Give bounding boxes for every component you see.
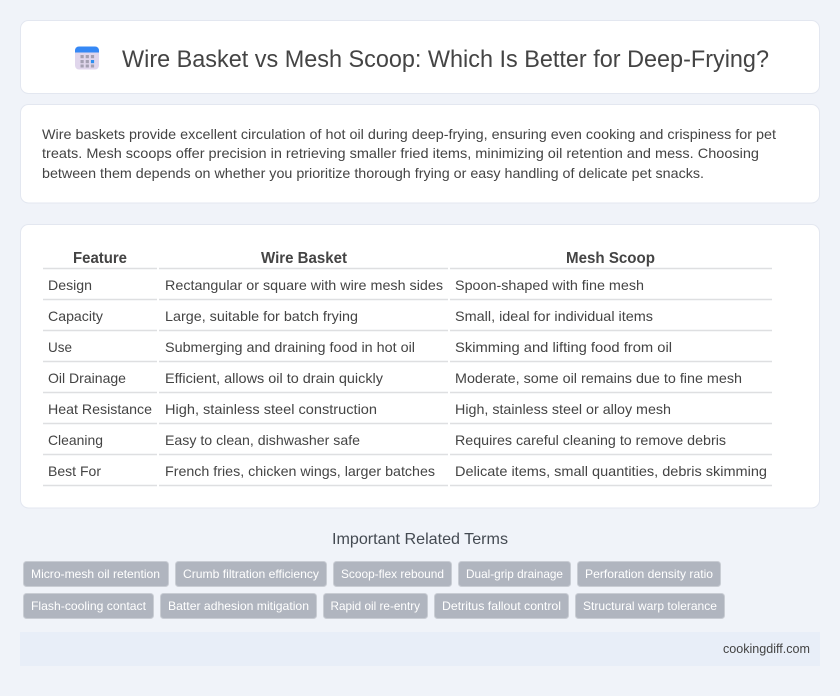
row: cleaning: Requires careful cleaning to remove debris [455, 432, 726, 448]
footer band [20, 632, 820, 666]
row: heat resistance: High, stainless steel construction [165, 401, 377, 417]
table header row: Mesh Scoop [566, 250, 655, 267]
row: heat resistance: Heat Resistance [48, 401, 152, 417]
row: use: Skimming and lifting food from oil [455, 339, 672, 355]
row: best for: Delicate items, small quantities, debris skimming [455, 463, 767, 479]
tag: structural warp tolerance: Structural warp tolerance [583, 599, 717, 613]
row: heat resistance [43, 401, 772, 424]
panel: introduction [20, 104, 820, 203]
icon: calendar [75, 46, 99, 70]
row: best for: French fries, chicken wings, larger batches [165, 463, 435, 479]
row: oil drainage: Moderate, some oil remains due to fine mesh [455, 370, 742, 386]
row: capacity: Large, suitable for batch frying [165, 308, 358, 324]
panel: title header [20, 20, 820, 94]
tag: scoop-flex rebound [334, 562, 452, 586]
row: use [43, 339, 772, 362]
tag: batter adhesion mitigation [160, 594, 316, 618]
tag: detritus fallout control: Detritus fallout control [442, 599, 561, 613]
tag: structural warp tolerance [576, 594, 724, 618]
table header row: Feature [73, 250, 127, 267]
tag: crumb filtration efficiency [176, 562, 326, 586]
tag: rapid oil re-entry: Rapid oil re-entry [330, 599, 420, 613]
row: capacity [43, 308, 772, 330]
tag: perforation density ratio [578, 562, 720, 586]
tag: batter adhesion mitigation: Batter adhesion mitigation [168, 599, 309, 613]
table header row [43, 250, 772, 268]
row: capacity: Capacity [48, 308, 103, 324]
row: design: Design [48, 277, 92, 293]
row: oil drainage: Efficient, allows oil to drain quickly [165, 370, 383, 386]
tag: scoop-flex rebound: Scoop-flex rebound [341, 567, 444, 581]
footer source text: cookingdiff.com [723, 642, 810, 656]
related term tags [24, 562, 724, 618]
row: cleaning [43, 432, 772, 454]
row: use: Submerging and draining food in hot oil [165, 339, 415, 355]
intro text: treats. Mesh scoops offer precision in retrieving smaller fried items, minimizing oil retention and mess. Choosing [42, 145, 759, 161]
panel: comparison table [20, 224, 820, 508]
tag: perforation density ratio: Perforation density ratio [585, 567, 713, 581]
heading: important related terms: Important Related Terms [332, 531, 508, 548]
tag: rapid oil re-entry [324, 594, 428, 618]
row: design [43, 277, 772, 300]
intro text: between them depends on whether you prioritize thorough frying or easy handling of delicate pet snacks. [42, 165, 704, 181]
row: cleaning: Cleaning [48, 432, 103, 448]
tag: detritus fallout control [434, 594, 568, 618]
tag: crumb filtration efficiency: Crumb filtration efficiency [183, 567, 319, 581]
row: oil drainage [43, 370, 772, 392]
table header row: Wire Basket [261, 250, 347, 267]
row: use: Use [48, 339, 72, 355]
row: design: Rectangular or square with wire mesh sides [165, 277, 443, 293]
row: capacity: Small, ideal for individual items [455, 308, 653, 324]
row: best for: Best For [48, 463, 101, 479]
row: oil drainage: Oil Drainage [48, 370, 126, 386]
tag: flash-cooling contact [24, 594, 154, 618]
tag: dual-grip drainage [458, 562, 570, 586]
intro text [42, 126, 776, 181]
row: design: Spoon-shaped with fine mesh [455, 277, 644, 293]
intro text: Wire baskets provide excellent circulation of hot oil during deep-frying, ensuring even cooking and crispiness for pet [42, 126, 776, 142]
tag: micro-mesh oil retention [24, 562, 168, 586]
row: heat resistance: High, stainless steel or alloy mesh [455, 401, 671, 417]
title: Wire Basket vs Mesh Scoop: Which Is Better for Deep-Frying? [122, 46, 769, 73]
row: cleaning: Easy to clean, dishwasher safe [165, 432, 360, 448]
tag: micro-mesh oil retention: Micro-mesh oil retention [31, 567, 160, 581]
row: best for [43, 463, 772, 486]
tag: flash-cooling contact: Flash-cooling contact [31, 599, 147, 613]
tag: dual-grip drainage: Dual-grip drainage [466, 567, 563, 581]
